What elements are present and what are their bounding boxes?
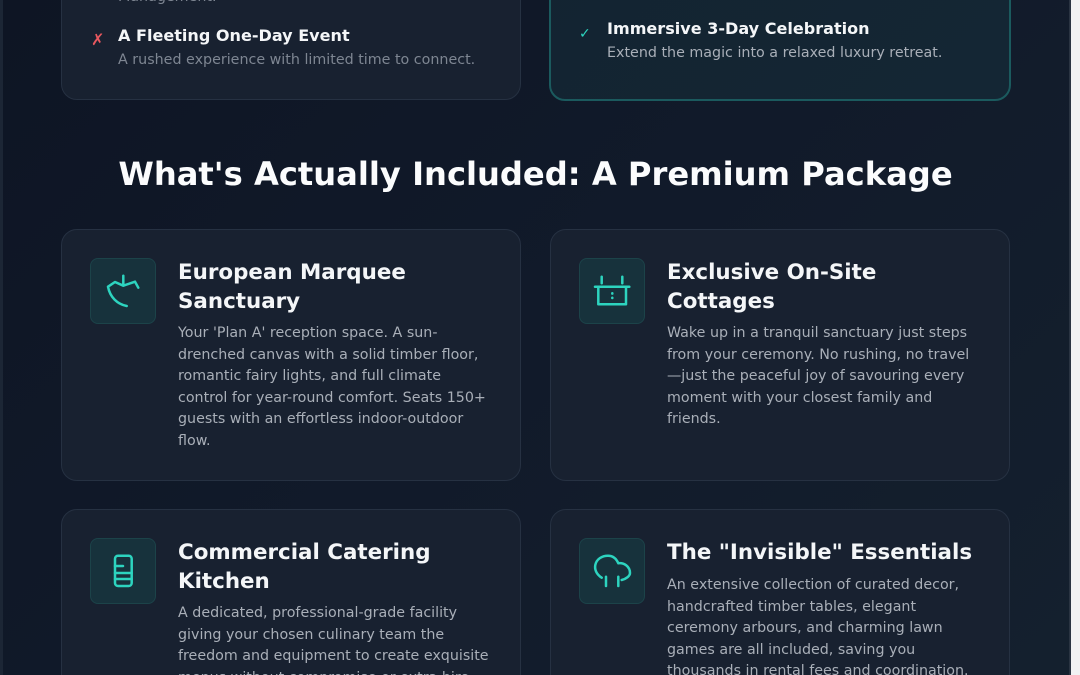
- card text: [667, 325, 969, 427]
- card title: European Marquee: [178, 260, 406, 285]
- card text: handcrafted timber tables, elegant: [667, 598, 916, 614]
- panel: typical venue comparison: [60, 0, 521, 100]
- card text: Wake up in a tranquil sanctuary just steps: [667, 325, 967, 341]
- card text: ceremony arbours, and charming lawn: [667, 620, 943, 636]
- card text: drenched canvas with a solid timber floor,: [178, 346, 478, 362]
- card text: romantic fairy lights, and full climate: [178, 368, 441, 384]
- card text: freedom and equipment to create exquisite: [178, 648, 489, 664]
- list item heading: one-day event: A Fleeting One-Day Event: [118, 26, 350, 45]
- card text: games are all included, saving you: [667, 642, 915, 658]
- list item text: 3-day celebration: Extend the magic into a relaxed luxury retreat.: [607, 45, 942, 61]
- panel: Commercial Catering Kitchen: [60, 509, 521, 675]
- card title: [667, 260, 876, 314]
- card title: Exclusive On-Site: [667, 260, 876, 285]
- icon: kitchen: [90, 538, 156, 604]
- card title: Commercial Catering: [178, 540, 431, 565]
- list item text: one-day event: A rushed experience with limited time to connect.: [118, 52, 475, 68]
- card title: Sanctuary: [178, 289, 300, 314]
- card title: The "Invisible" Essentials: [667, 540, 972, 565]
- card text: giving your chosen culinary team the: [178, 626, 444, 642]
- icon: red cross: ✗: [91, 30, 104, 49]
- card text: guests with an effortless indoor-outdoor: [178, 411, 463, 427]
- panel: The Invisible Essentials: [550, 509, 1010, 675]
- card text: friends.: [667, 411, 721, 427]
- icon: cloud: [579, 538, 645, 604]
- card text: A dedicated, professional-grade facility: [178, 605, 457, 621]
- card title: [178, 260, 406, 314]
- card text: control for year-round comfort. Seats 150+: [178, 390, 486, 406]
- heading: What's Actually Included: A Premium Package: [118, 155, 953, 193]
- icon: marquee: [90, 258, 156, 324]
- icon: teal check: ✓: [579, 26, 591, 42]
- card text: from your ceremony. No rushing, no travel: [667, 346, 969, 362]
- panel: premium venue comparison: [549, 0, 1011, 101]
- card text: flow.: [178, 432, 211, 448]
- card text: Your 'Plan A' reception space. A sun-: [178, 325, 437, 341]
- card title: Cottages: [667, 289, 775, 314]
- card text: —just the peaceful joy of savouring every: [667, 368, 964, 384]
- panel: Exclusive On-Site Cottages: [550, 229, 1010, 481]
- list item heading: 3-day celebration: Immersive 3-Day Celebration: [607, 19, 870, 38]
- card text: [178, 605, 489, 675]
- card text: [667, 577, 969, 675]
- card text: moment with your closest family and: [667, 390, 932, 406]
- card text: [178, 325, 486, 448]
- card title: [178, 540, 431, 594]
- card title: Kitchen: [178, 569, 270, 594]
- panel: European Marquee Sanctuary: [60, 229, 521, 481]
- card text: An extensive collection of curated decor,: [667, 577, 959, 593]
- icon: cottage: [579, 258, 645, 324]
